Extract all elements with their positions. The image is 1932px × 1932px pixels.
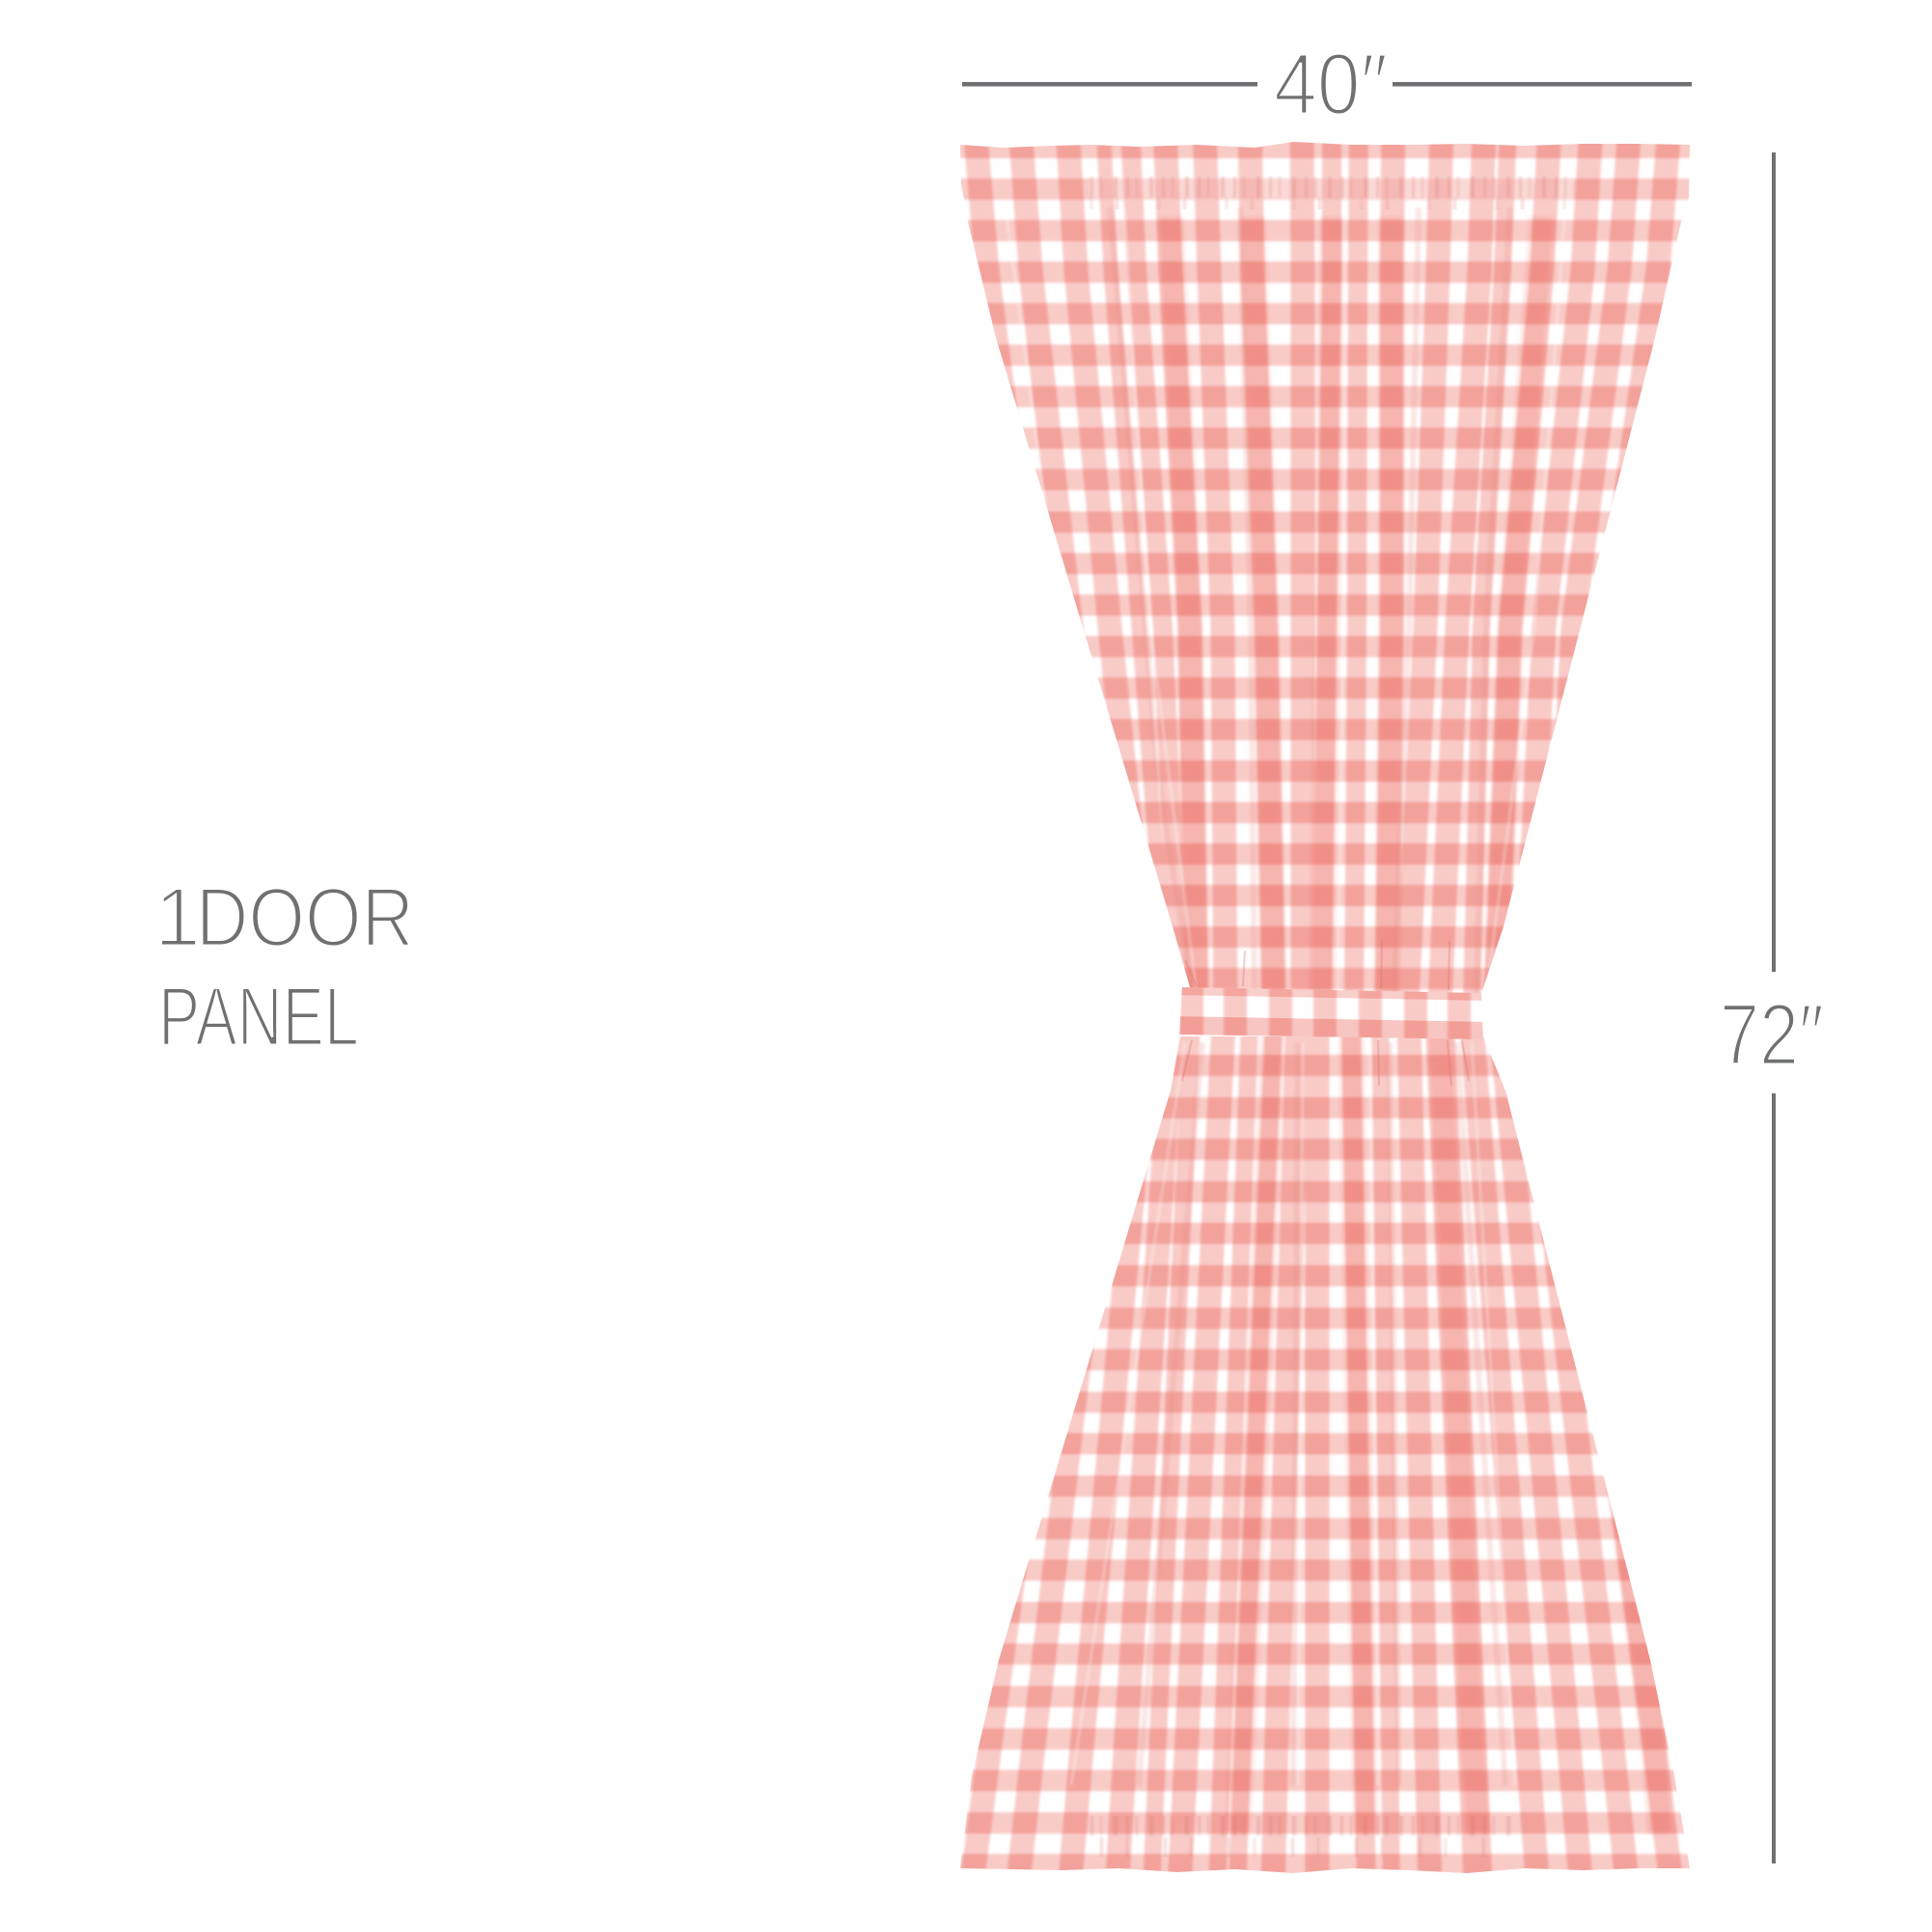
height dimension: 72 inches: 72″ bbox=[1720, 987, 1824, 1084]
creases below the tieback bbox=[1182, 1040, 1469, 1086]
curtain: gingham door panel bbox=[946, 125, 1718, 1891]
tieback belt bbox=[1179, 987, 1483, 1039]
label: 1 door panel bbox=[154, 871, 414, 1063]
curtain upper section bbox=[946, 125, 1718, 1004]
creases above the tieback bbox=[1185, 941, 1449, 990]
rod pocket gathers bbox=[1090, 178, 1573, 207]
width dimension: 40 inches bbox=[962, 37, 1692, 133]
curtain lower section bbox=[946, 1023, 1718, 1891]
bottom pocket gathers bbox=[1090, 1818, 1515, 1855]
label: 1 door panel: PANEL bbox=[158, 971, 359, 1063]
width dimension: 40 inches: 40″ bbox=[1274, 37, 1388, 133]
label: 1 door panel: DOOR bbox=[196, 871, 414, 964]
height dimension: 72 inches bbox=[1720, 152, 1824, 1863]
label: 1 door panel: 1 bbox=[154, 871, 201, 964]
